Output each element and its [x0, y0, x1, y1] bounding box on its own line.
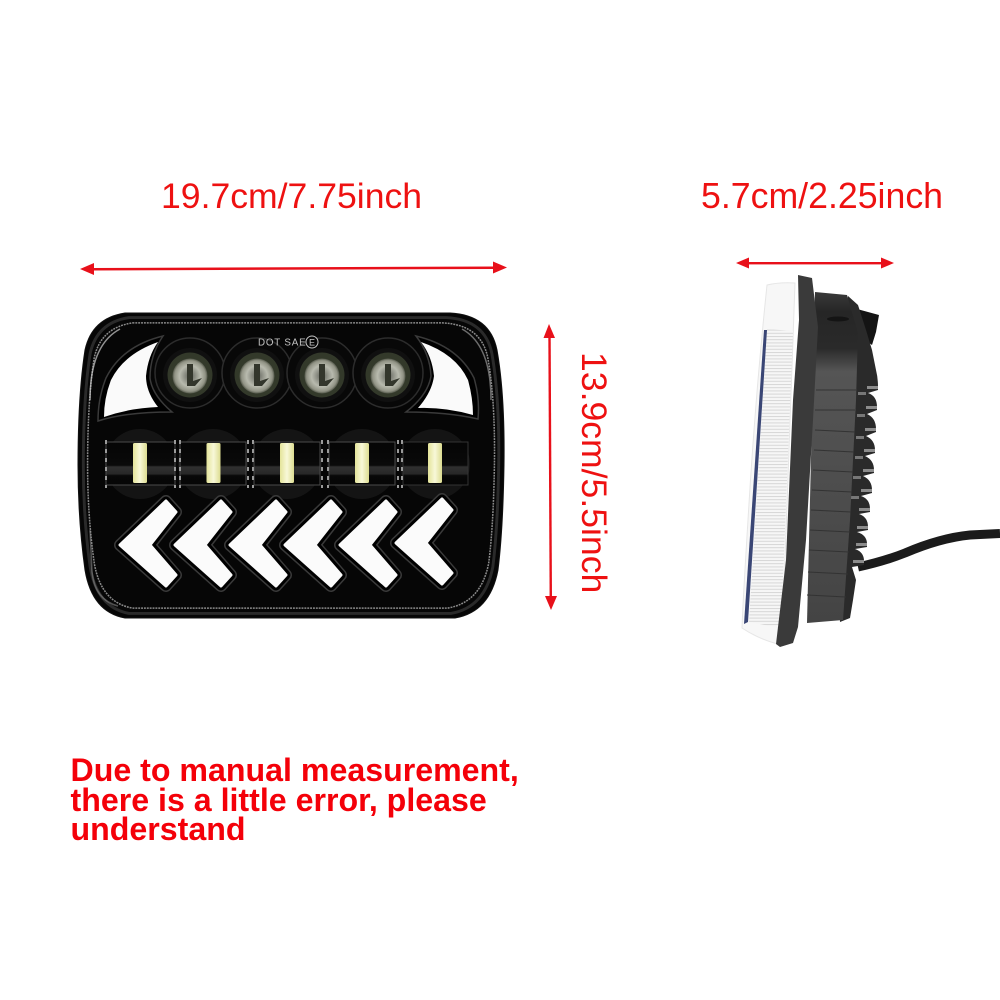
- side view of headlight: [742, 275, 1000, 647]
- cooling fins: [830, 296, 878, 622]
- height dimension arrow: [544, 324, 557, 610]
- front view of headlight: [78, 313, 504, 618]
- right horn light: [406, 336, 478, 419]
- blue lens edge: [744, 330, 767, 624]
- height dimension label: 13.9cm/5.5inch: [574, 352, 614, 593]
- chrome rim: [83, 318, 499, 613]
- measurement disclaimer note: Due to manual measurement,: [70, 752, 519, 788]
- front flange: [776, 275, 818, 647]
- width dimension arrow: [80, 262, 507, 275]
- lens cover: [742, 283, 795, 645]
- housing: [78, 313, 504, 618]
- E mark: [306, 336, 318, 348]
- mounting bracket: [857, 309, 879, 345]
- E mark: E: [309, 338, 315, 348]
- power cable: [858, 534, 1000, 567]
- width dimension label: 19.7cm/7.75inch: [161, 176, 422, 216]
- measurement disclaimer note: there is a little error, please: [70, 782, 487, 818]
- high beam LED modules: [105, 429, 470, 499]
- ribbed lens strip: [749, 329, 793, 628]
- left horn light: [98, 336, 172, 421]
- measurement disclaimer note: [70, 752, 519, 847]
- sequential arrow lights: [120, 499, 452, 586]
- low beam lenses: [155, 338, 423, 408]
- fin tabs: [851, 386, 878, 563]
- DOT SAE marking: DOT SAE: [258, 338, 306, 348]
- depth dimension label: 5.7cm/2.25inch: [701, 176, 943, 216]
- measurement disclaimer note: understand: [70, 811, 246, 847]
- depth dimension arrow: [736, 258, 894, 268]
- rear housing: [807, 292, 858, 623]
